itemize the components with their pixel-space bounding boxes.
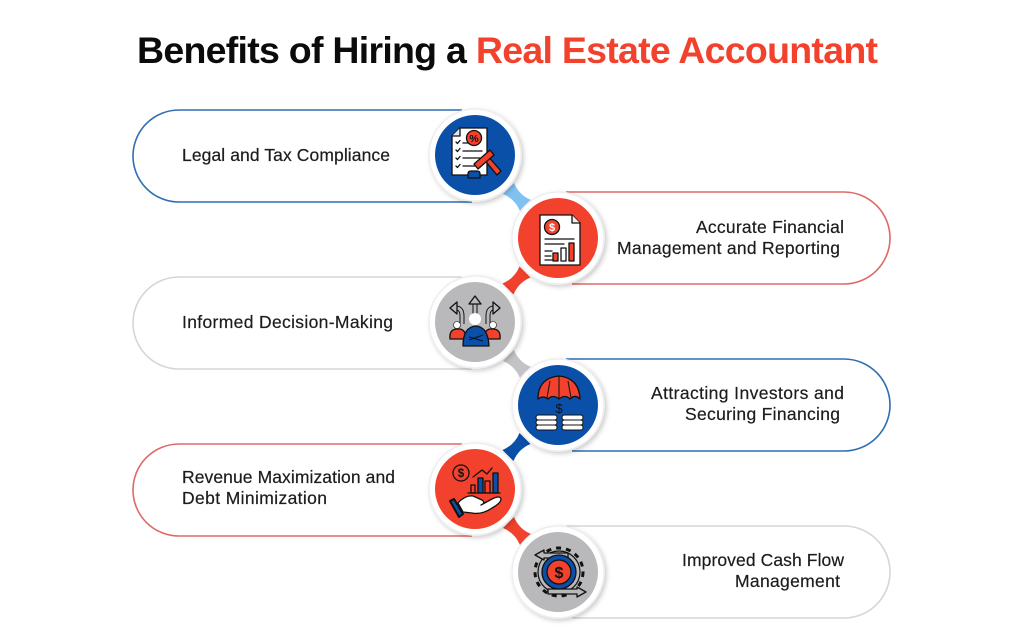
pill: revenue maximization: Revenue Maximization and <box>182 467 395 487</box>
pill: legal and tax compliance: Legal and Tax Compliance <box>182 145 390 165</box>
pill: accurate financial management: Accurate Financial <box>696 217 844 237</box>
pill: revenue maximization <box>133 444 472 536</box>
pill: accurate financial management <box>566 192 890 284</box>
pill: improved cash flow <box>566 526 890 618</box>
icon badge: umbrella and coins: $ <box>555 401 563 416</box>
connector: dark blue <box>502 433 530 461</box>
pill: improved cash flow: Management <box>735 571 840 591</box>
pill: informed decision-making <box>133 277 472 369</box>
pill: accurate financial management: Management and Reporting <box>617 238 840 258</box>
connector: red <box>502 266 530 294</box>
icon badge: umbrella and coins <box>512 359 604 451</box>
icon badge: financial report <box>512 192 604 284</box>
pill: attracting investors: Securing Financing <box>685 404 840 424</box>
pill: attracting investors: Attracting Investors and <box>651 383 844 403</box>
connector: light blue <box>503 183 531 211</box>
pill: attracting investors <box>566 359 890 451</box>
title: Benefits of Hiring a Real Estate Accountant <box>137 29 878 71</box>
pill: informed decision-making: Informed Decision-Making <box>182 312 393 332</box>
icon badge: financial report: $ <box>549 222 555 234</box>
icon badge: revenue hand and chart <box>429 443 521 535</box>
icon badge: legal document and gavel <box>429 109 521 201</box>
icon badge: legal document and gavel: % <box>469 133 479 145</box>
connector: grey <box>503 350 531 378</box>
pill: revenue maximization: Debt Minimization <box>182 488 327 508</box>
pill: legal and tax compliance <box>133 110 472 202</box>
icon badge: cash flow gear: $ <box>555 565 564 582</box>
connector: red lower <box>503 517 531 545</box>
icon badge: revenue hand and chart: $ <box>458 468 465 480</box>
pill: improved cash flow: Improved Cash Flow <box>682 550 844 570</box>
icon badge: cash flow gear <box>512 526 604 618</box>
icon badge: decision-making <box>429 276 521 368</box>
